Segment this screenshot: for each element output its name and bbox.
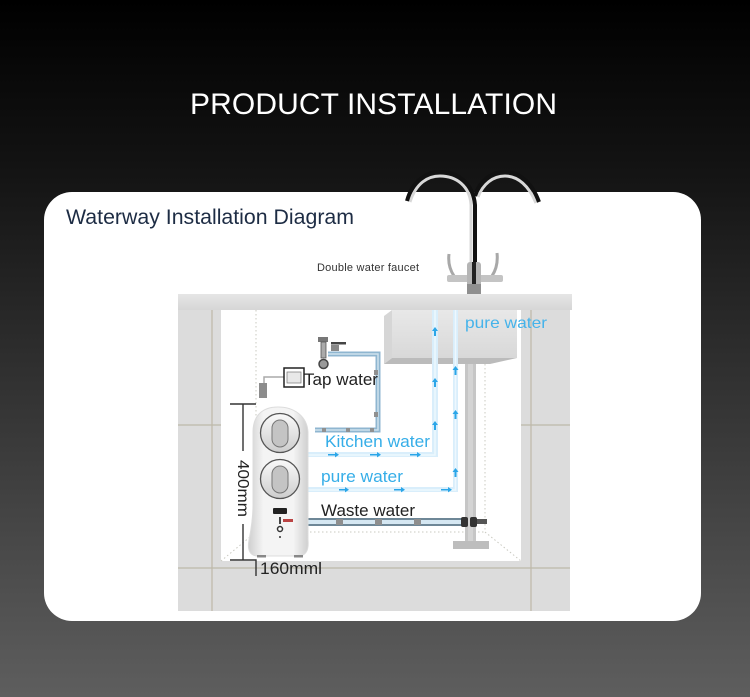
label: waste water: Waste water (321, 502, 416, 520)
tap water pipe (315, 354, 378, 432)
label: pure water upper: pure water (465, 315, 548, 332)
label: pure water lower: pure water (321, 468, 404, 486)
label: tap water: Tap water (304, 371, 379, 389)
countertop (178, 294, 572, 310)
cabinet wall (178, 310, 570, 611)
pure water pipes (307, 310, 458, 492)
label: kitchen water: Kitchen water (325, 433, 431, 451)
flow arrows (328, 327, 458, 492)
water purifier unit (248, 407, 308, 558)
sink (384, 310, 517, 364)
panel: diagram card (44, 192, 701, 621)
label: double water faucet: Double water faucet (317, 262, 419, 274)
dimension: 400mm (230, 404, 256, 576)
waste valve (461, 517, 487, 527)
tap valve (318, 337, 346, 368)
title: PRODUCT INSTALLATION (190, 88, 557, 121)
waste water pipe (307, 518, 462, 526)
drain pipe (453, 364, 489, 549)
faucet (407, 172, 539, 294)
icon: filter controller box (259, 368, 304, 398)
dimension: 400mm: 400mm (234, 460, 251, 517)
dimension: 160mm: 160mml (260, 560, 322, 578)
heading: waterway diagram: Waterway Installation Diagram (66, 206, 354, 229)
